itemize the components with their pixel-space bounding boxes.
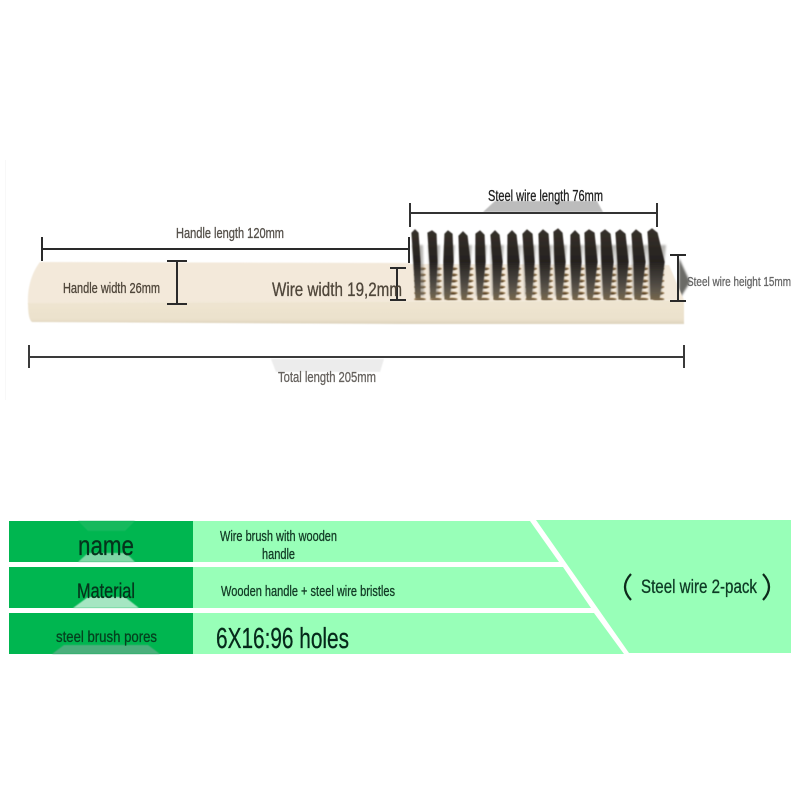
steel wire tufts (412, 229, 664, 299)
material heading: Material (77, 580, 135, 603)
pores value: 6X16:96 holes (216, 623, 349, 655)
row: steel brush pores (9, 613, 624, 655)
steel wire halo (412, 245, 666, 296)
panel: pack size (536, 520, 791, 653)
wooden handle top face (28, 262, 684, 304)
row header: material (9, 567, 193, 608)
row value: material (193, 567, 591, 608)
label: wire width: Wire width 19,2mm (272, 280, 402, 301)
total-length label smudge (271, 359, 384, 372)
label: handle width: Handle width 26mm (63, 280, 160, 297)
dimension line: steel wire length (410, 203, 657, 227)
panel: specification table (9, 520, 791, 655)
dimension marker: wire width (390, 268, 406, 300)
dimension line: handle length (42, 237, 409, 263)
white gap between upper bristles (410, 228, 672, 264)
name value line 2: handle (262, 546, 295, 563)
row header: name (9, 521, 193, 562)
header smudge (52, 645, 160, 654)
dimension line: total length (29, 345, 684, 368)
header smudges (78, 521, 135, 531)
dimension marker: steel wire height (670, 255, 686, 301)
row: material (9, 567, 591, 608)
row value: pores (193, 613, 624, 654)
right bracket (763, 574, 769, 600)
label: total length: Total length 205mm (278, 369, 376, 386)
label: steel wire length: Steel wire length 76mm (488, 188, 603, 205)
bristle hole rows (412, 266, 666, 300)
material value: Wooden handle + steel wire bristles (221, 583, 395, 600)
name heading: name (78, 530, 134, 561)
row header: pores (9, 613, 193, 654)
panel: brush diagram (5, 160, 791, 400)
row: name (9, 521, 559, 563)
name value line 1: Wire brush with wooden (220, 528, 337, 545)
pack panel background (536, 520, 791, 653)
wooden handle front face (28, 300, 684, 324)
header smudge (73, 597, 139, 608)
pores heading: steel brush pores (56, 629, 157, 646)
pack text: Steel wire 2-pack (641, 577, 757, 598)
label: handle length: Handle length 120mm (176, 225, 284, 242)
row value: name (193, 521, 559, 562)
wire-height label smudge (679, 258, 690, 300)
left bracket (625, 574, 631, 600)
photo edge (5, 160, 6, 400)
brush photo (28, 228, 684, 324)
dimension marker: handle width (167, 261, 187, 304)
wire-length label smudge (483, 201, 603, 212)
